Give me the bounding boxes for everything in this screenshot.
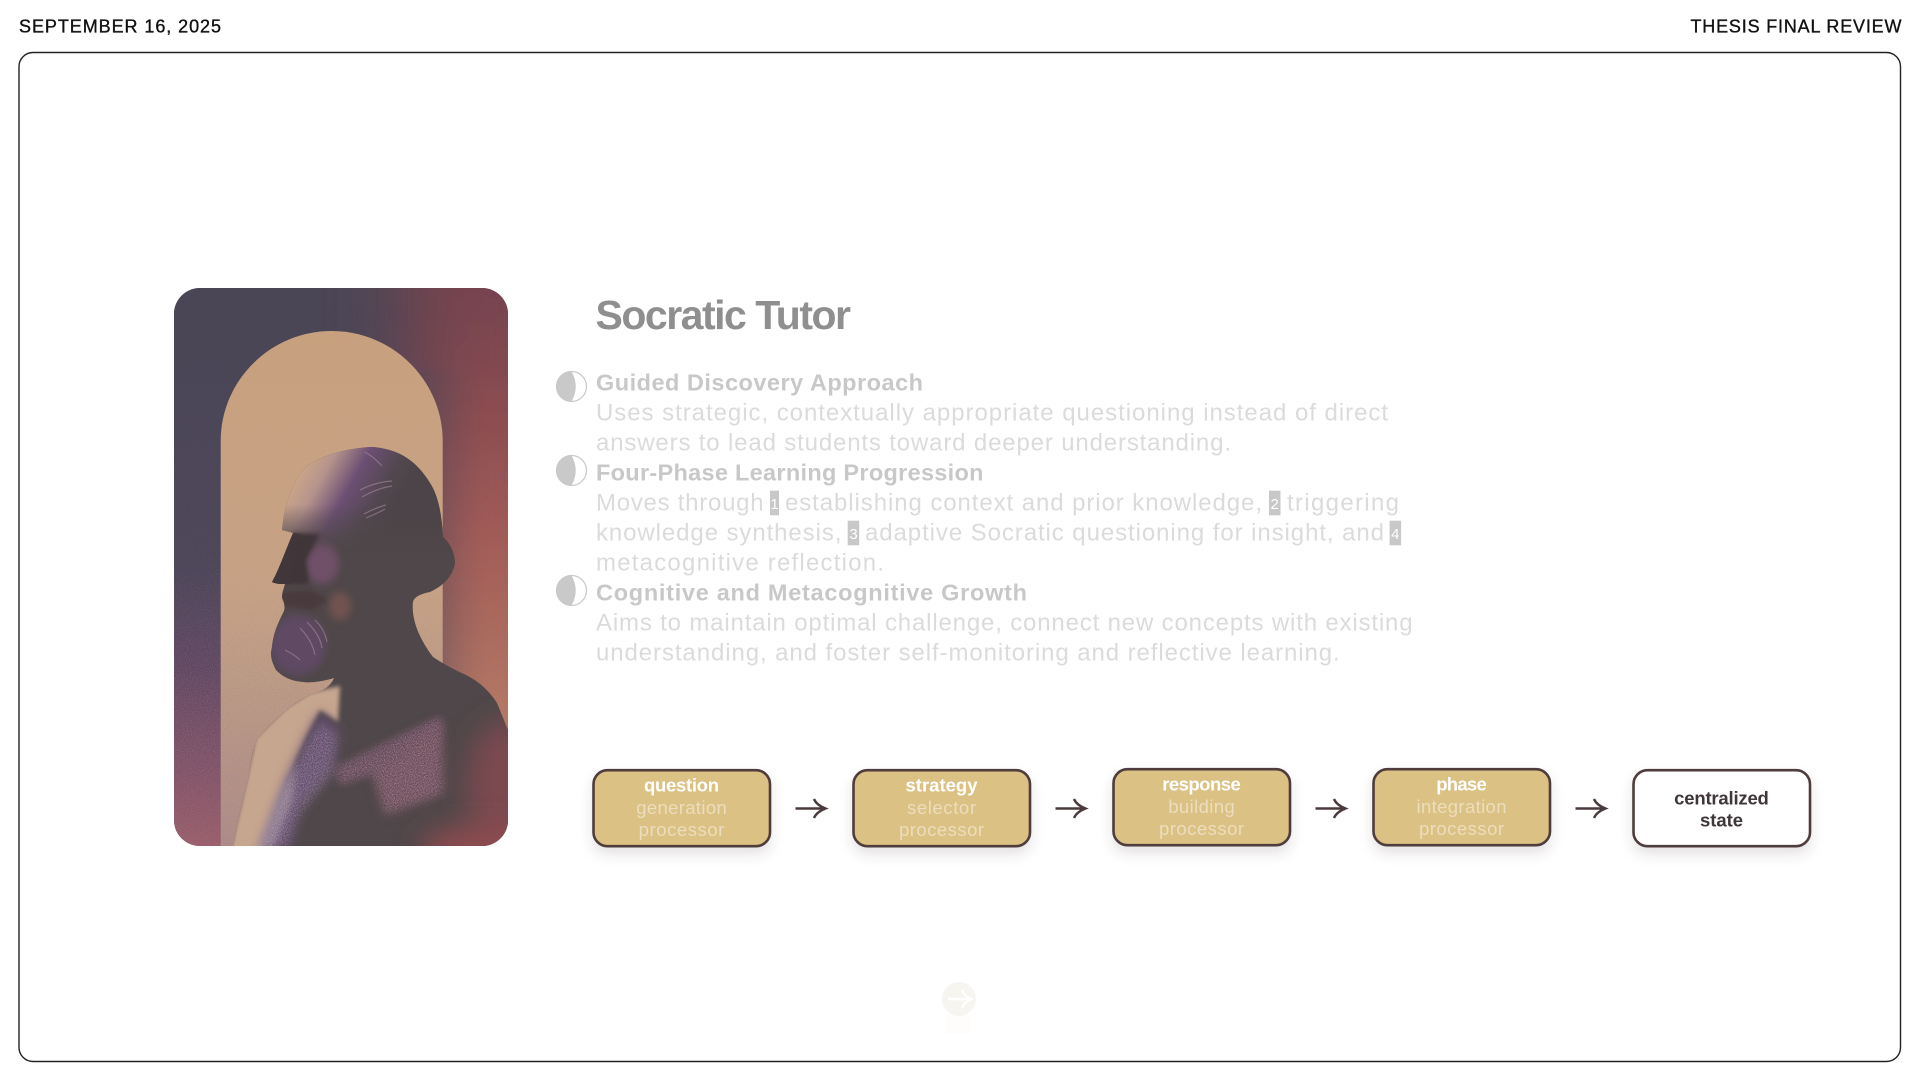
body text: understanding, and foster self-monitoring and reflective learning.: [596, 640, 1340, 667]
body text: answers to lead students toward deeper understanding.: [596, 430, 1231, 457]
icon: half circle: [556, 372, 586, 402]
hair and beard strands: [285, 452, 392, 660]
heading: Four-Phase Learning Progression: [596, 460, 984, 486]
box: centralized state: centralized: [1674, 787, 1769, 808]
skull shading: [282, 447, 443, 541]
drape cream band: [230, 686, 340, 850]
box: centralized state: [1634, 770, 1810, 846]
bullet: four-phase learning progression: [556, 456, 1401, 577]
nose tip edge: [270, 533, 300, 584]
chest streak: [335, 716, 444, 785]
body text: 1: [770, 496, 779, 513]
body text: Moves through: [596, 490, 764, 517]
lower right warmth: [456, 712, 508, 846]
cheek: [305, 544, 339, 584]
header title: THESIS FINAL REVIEW: [1690, 16, 1902, 36]
box: question generation processor: processor: [639, 819, 724, 840]
chest specks: [263, 715, 447, 846]
box: question generation processor: [594, 770, 770, 846]
body text: metacognitive reflection.: [596, 550, 884, 577]
heading: Guided Discovery Approach: [596, 370, 923, 396]
arrow: [796, 799, 826, 818]
box: phase integration processor: integration: [1416, 796, 1506, 817]
box: response building processor: building: [1168, 796, 1235, 817]
arch: [221, 331, 443, 846]
body text: [596, 610, 1413, 667]
moustache: [282, 590, 326, 609]
box: phase integration processor: [1374, 769, 1550, 845]
box: phase integration processor: phase: [1436, 774, 1487, 794]
icon: half circle: [556, 576, 586, 606]
arrow: [1316, 799, 1346, 818]
nose and brow shadow: [270, 533, 320, 584]
body text: knowledge synthesis,: [596, 520, 841, 547]
body text: 3: [849, 526, 858, 543]
arrow: [1056, 799, 1086, 818]
bullet: cognitive and metacognitive growth: [556, 576, 1413, 667]
body text: [596, 490, 1401, 577]
body text: establishing context and prior knowledge,: [785, 490, 1262, 517]
beard: [270, 615, 326, 675]
drape purple band: [262, 712, 340, 850]
body text: Aims to maintain optimal challenge, connect new concepts with existing: [596, 610, 1413, 637]
box: question generation processor: question: [644, 774, 719, 796]
box: strategy selector processor: processor: [899, 819, 984, 840]
header date: SEPTEMBER 16, 2025: [19, 16, 221, 36]
box: centralized state: state: [1700, 810, 1743, 831]
chest patch: [372, 722, 443, 815]
box: phase integration processor: processor: [1419, 818, 1504, 839]
box: strategy selector processor: strategy: [906, 774, 978, 796]
bullet: guided discovery approach: [556, 370, 1388, 457]
flow diagram: [594, 769, 1810, 846]
drape highlight streaks: [256, 760, 296, 850]
heading: Cognitive and Metacognitive Growth: [596, 580, 1027, 606]
icon: half circle: [556, 456, 586, 486]
figure: [233, 447, 508, 846]
box: response building processor: [1114, 769, 1290, 845]
body text: 2: [1271, 496, 1279, 513]
box: strategy selector processor: [854, 770, 1030, 846]
title: Socratic Tutor: [596, 292, 851, 338]
body text: [596, 400, 1388, 457]
body text: adaptive Socratic questioning for insight, and: [865, 520, 1384, 547]
arch grain: [174, 505, 508, 846]
box: question generation processor: generation: [636, 797, 727, 818]
panel: portrait illustration: [174, 288, 508, 846]
box: strategy selector processor: selector: [907, 797, 976, 818]
box: response building processor: processor: [1159, 818, 1244, 839]
icon: faded next arrow button: [942, 982, 976, 1034]
box: response building processor: response: [1162, 774, 1241, 794]
body text: Uses strategic, contextually appropriate questioning instead of direct: [596, 400, 1388, 427]
body text: 4: [1391, 526, 1399, 543]
arrow: [1576, 799, 1606, 818]
body text: triggering: [1287, 490, 1399, 517]
